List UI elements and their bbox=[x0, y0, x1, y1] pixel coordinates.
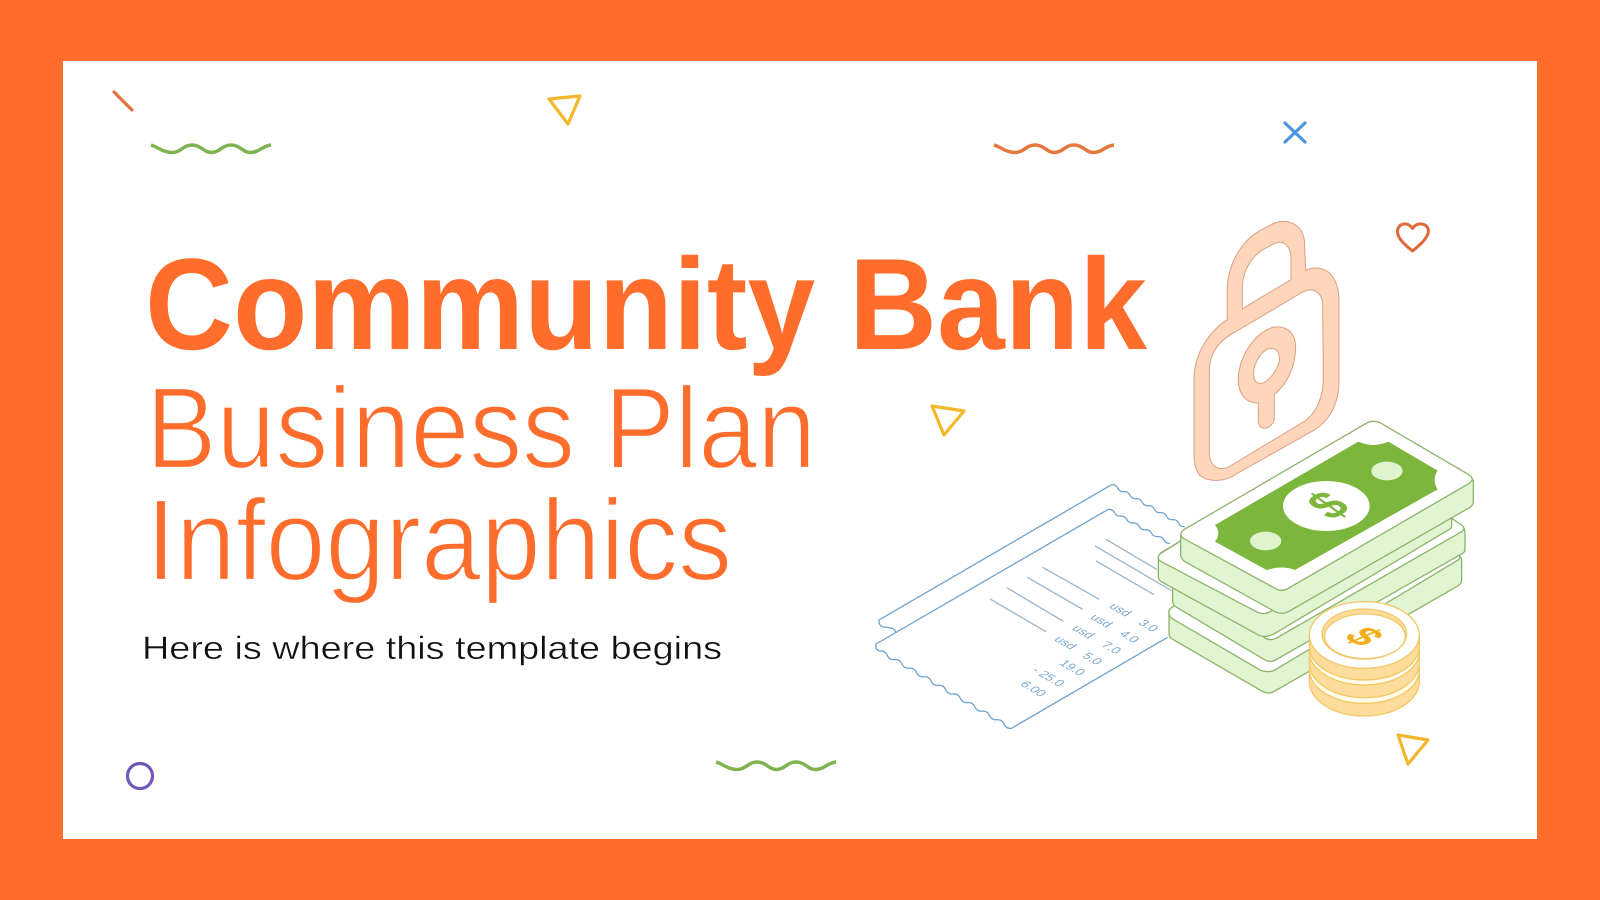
title: Infographics: Infographics bbox=[146, 475, 732, 605]
top banknote thickness bbox=[1181, 480, 1473, 613]
banknote centre circle bbox=[1283, 481, 1370, 531]
illustration: stack of banknotes bbox=[1158, 421, 1473, 693]
second banknote bbox=[1158, 470, 1452, 636]
third banknote bbox=[1173, 503, 1465, 661]
decoration: purple circle bbox=[128, 764, 152, 788]
receipt text: usd bbox=[1051, 634, 1080, 652]
receipt text: usd bbox=[1069, 623, 1098, 641]
illustration: receipt bbox=[876, 485, 1185, 728]
receipt text: usd bbox=[1087, 612, 1116, 630]
receipt text: - 25.0 bbox=[1029, 665, 1068, 689]
receipt item lines bbox=[990, 539, 1172, 632]
receipt text: 4.0 bbox=[1116, 629, 1143, 645]
title: Community Bank: Community Bank bbox=[145, 231, 1148, 377]
receipt text: 19.0 bbox=[1056, 658, 1089, 678]
decoration: yellow triangle top bbox=[549, 96, 580, 124]
decoration: yellow triangle bottom right bbox=[1398, 735, 1428, 764]
banknote small ovals bbox=[1371, 462, 1403, 480]
receipt text bbox=[1017, 601, 1162, 699]
receipt text: 6.00 bbox=[1017, 679, 1050, 699]
decoration: orange slash bbox=[114, 92, 132, 110]
subtitle: Here is where this template begins bbox=[142, 630, 722, 666]
receipt text: 3.0 bbox=[1135, 618, 1162, 634]
illustration: coin stack bbox=[1309, 602, 1419, 716]
receipt paper bbox=[876, 485, 1185, 728]
receipt text: 7.0 bbox=[1098, 640, 1125, 656]
decoration: orange wave top bbox=[994, 145, 1114, 152]
decoration: green wave bottom bbox=[716, 762, 836, 770]
top coin bbox=[1309, 602, 1419, 680]
bottom coin bbox=[1309, 637, 1419, 716]
receipt text: usd bbox=[1106, 601, 1135, 619]
coin dollar sign: $ bbox=[1333, 621, 1396, 651]
middle coin bbox=[1309, 618, 1419, 698]
decoration: heart bbox=[1397, 224, 1428, 251]
title: Business Plan: Business Plan bbox=[146, 363, 816, 493]
banknote dollar sign: $ bbox=[1294, 482, 1361, 527]
decoration: yellow triangle middle bbox=[932, 406, 964, 435]
receipt text: 5.0 bbox=[1079, 651, 1106, 667]
icon: padlock bbox=[1194, 221, 1339, 480]
decoration: green wave top bbox=[151, 145, 271, 152]
top banknote face bbox=[1181, 421, 1472, 590]
white panel bbox=[63, 61, 1537, 839]
bottom banknote bbox=[1169, 503, 1462, 693]
banknote green print bbox=[1215, 442, 1438, 570]
decoration: blue cross bbox=[1285, 123, 1305, 142]
